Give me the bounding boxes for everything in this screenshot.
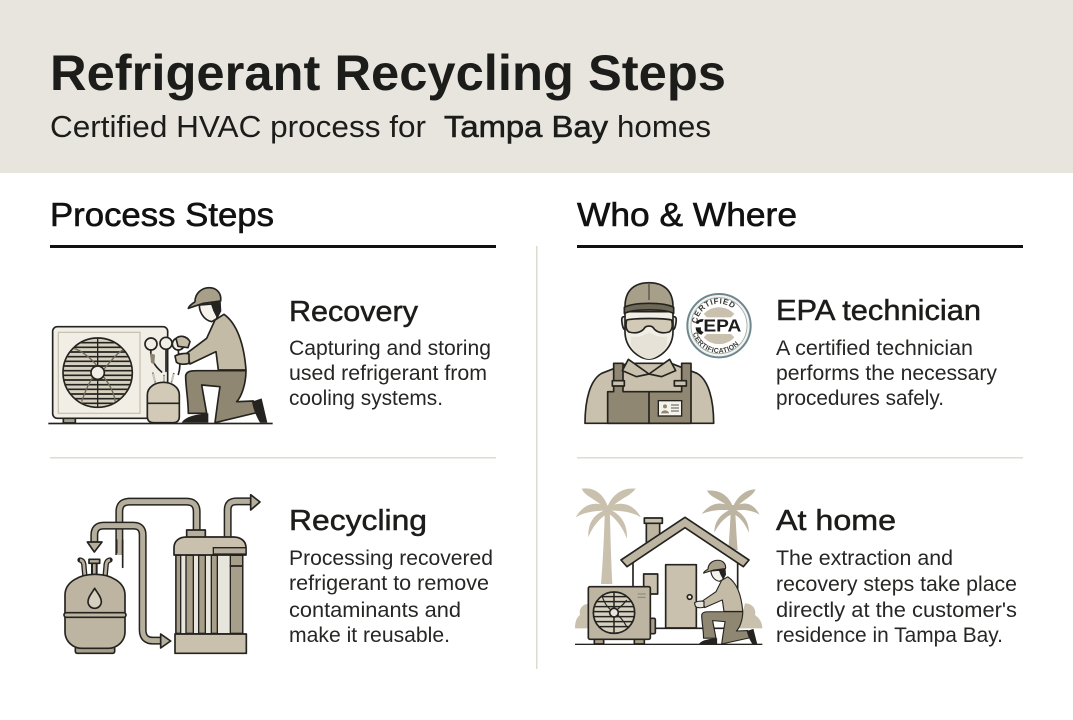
text: recovery: Capturing and storing <box>289 337 491 360</box>
text: recovery: used refrigerant from <box>289 362 487 385</box>
icon: technician servicing house with palm trees <box>575 488 762 645</box>
text: at home: At home <box>776 505 896 537</box>
panel: who and where <box>575 196 1023 647</box>
subtitle: Certified HVAC process for <box>50 109 426 144</box>
text: recovery <box>289 296 491 410</box>
text: recycling: Processing recovered <box>289 547 493 570</box>
text: EPA technician: performs the necessary <box>776 362 997 385</box>
text: at home <box>776 505 1017 647</box>
subtitle: homes <box>617 109 711 144</box>
icon: EPA technician with badge: CERTIFICATION <box>693 332 739 354</box>
text: recycling: Recycling <box>289 505 427 537</box>
icon: refrigerant tank and recycling machine with pipes <box>64 495 260 653</box>
text: EPA technician: EPA technician <box>776 295 981 327</box>
text: at home: The extraction and <box>776 547 953 570</box>
text: recycling <box>289 505 493 647</box>
text: at home: residence in Tampa Bay. <box>776 624 1003 647</box>
icon: EPA technician with badge: EPA <box>703 316 742 336</box>
text: at home: directly at the customer's <box>776 599 1017 622</box>
text: EPA technician: A certified technician <box>776 337 973 360</box>
subtitle: Tampa Bay <box>444 109 609 144</box>
heading: who and where: Who & Where <box>577 196 797 233</box>
subtitle <box>50 109 711 144</box>
text: recycling: contaminants and <box>289 599 461 622</box>
icon: technician recovering refrigerant from outdoor unit <box>48 288 273 424</box>
text: recycling: make it reusable. <box>289 624 450 647</box>
icon: EPA technician with badge: CERTIFIED <box>692 298 735 323</box>
text: recovery: cooling systems. <box>289 387 443 410</box>
panel: process steps <box>48 196 496 653</box>
text: EPA technician: procedures safely. <box>776 387 944 410</box>
text: recovery: Recovery <box>289 296 419 328</box>
text: at home: recovery steps take place <box>776 573 1017 596</box>
heading: process steps: Process Steps <box>50 196 274 233</box>
text: recycling: refrigerant to remove <box>289 572 489 595</box>
text: EPA technician <box>776 295 997 410</box>
title: Refrigerant Recycling Steps <box>50 45 726 101</box>
header band <box>0 0 1073 173</box>
icon: EPA technician with badge <box>584 282 752 424</box>
